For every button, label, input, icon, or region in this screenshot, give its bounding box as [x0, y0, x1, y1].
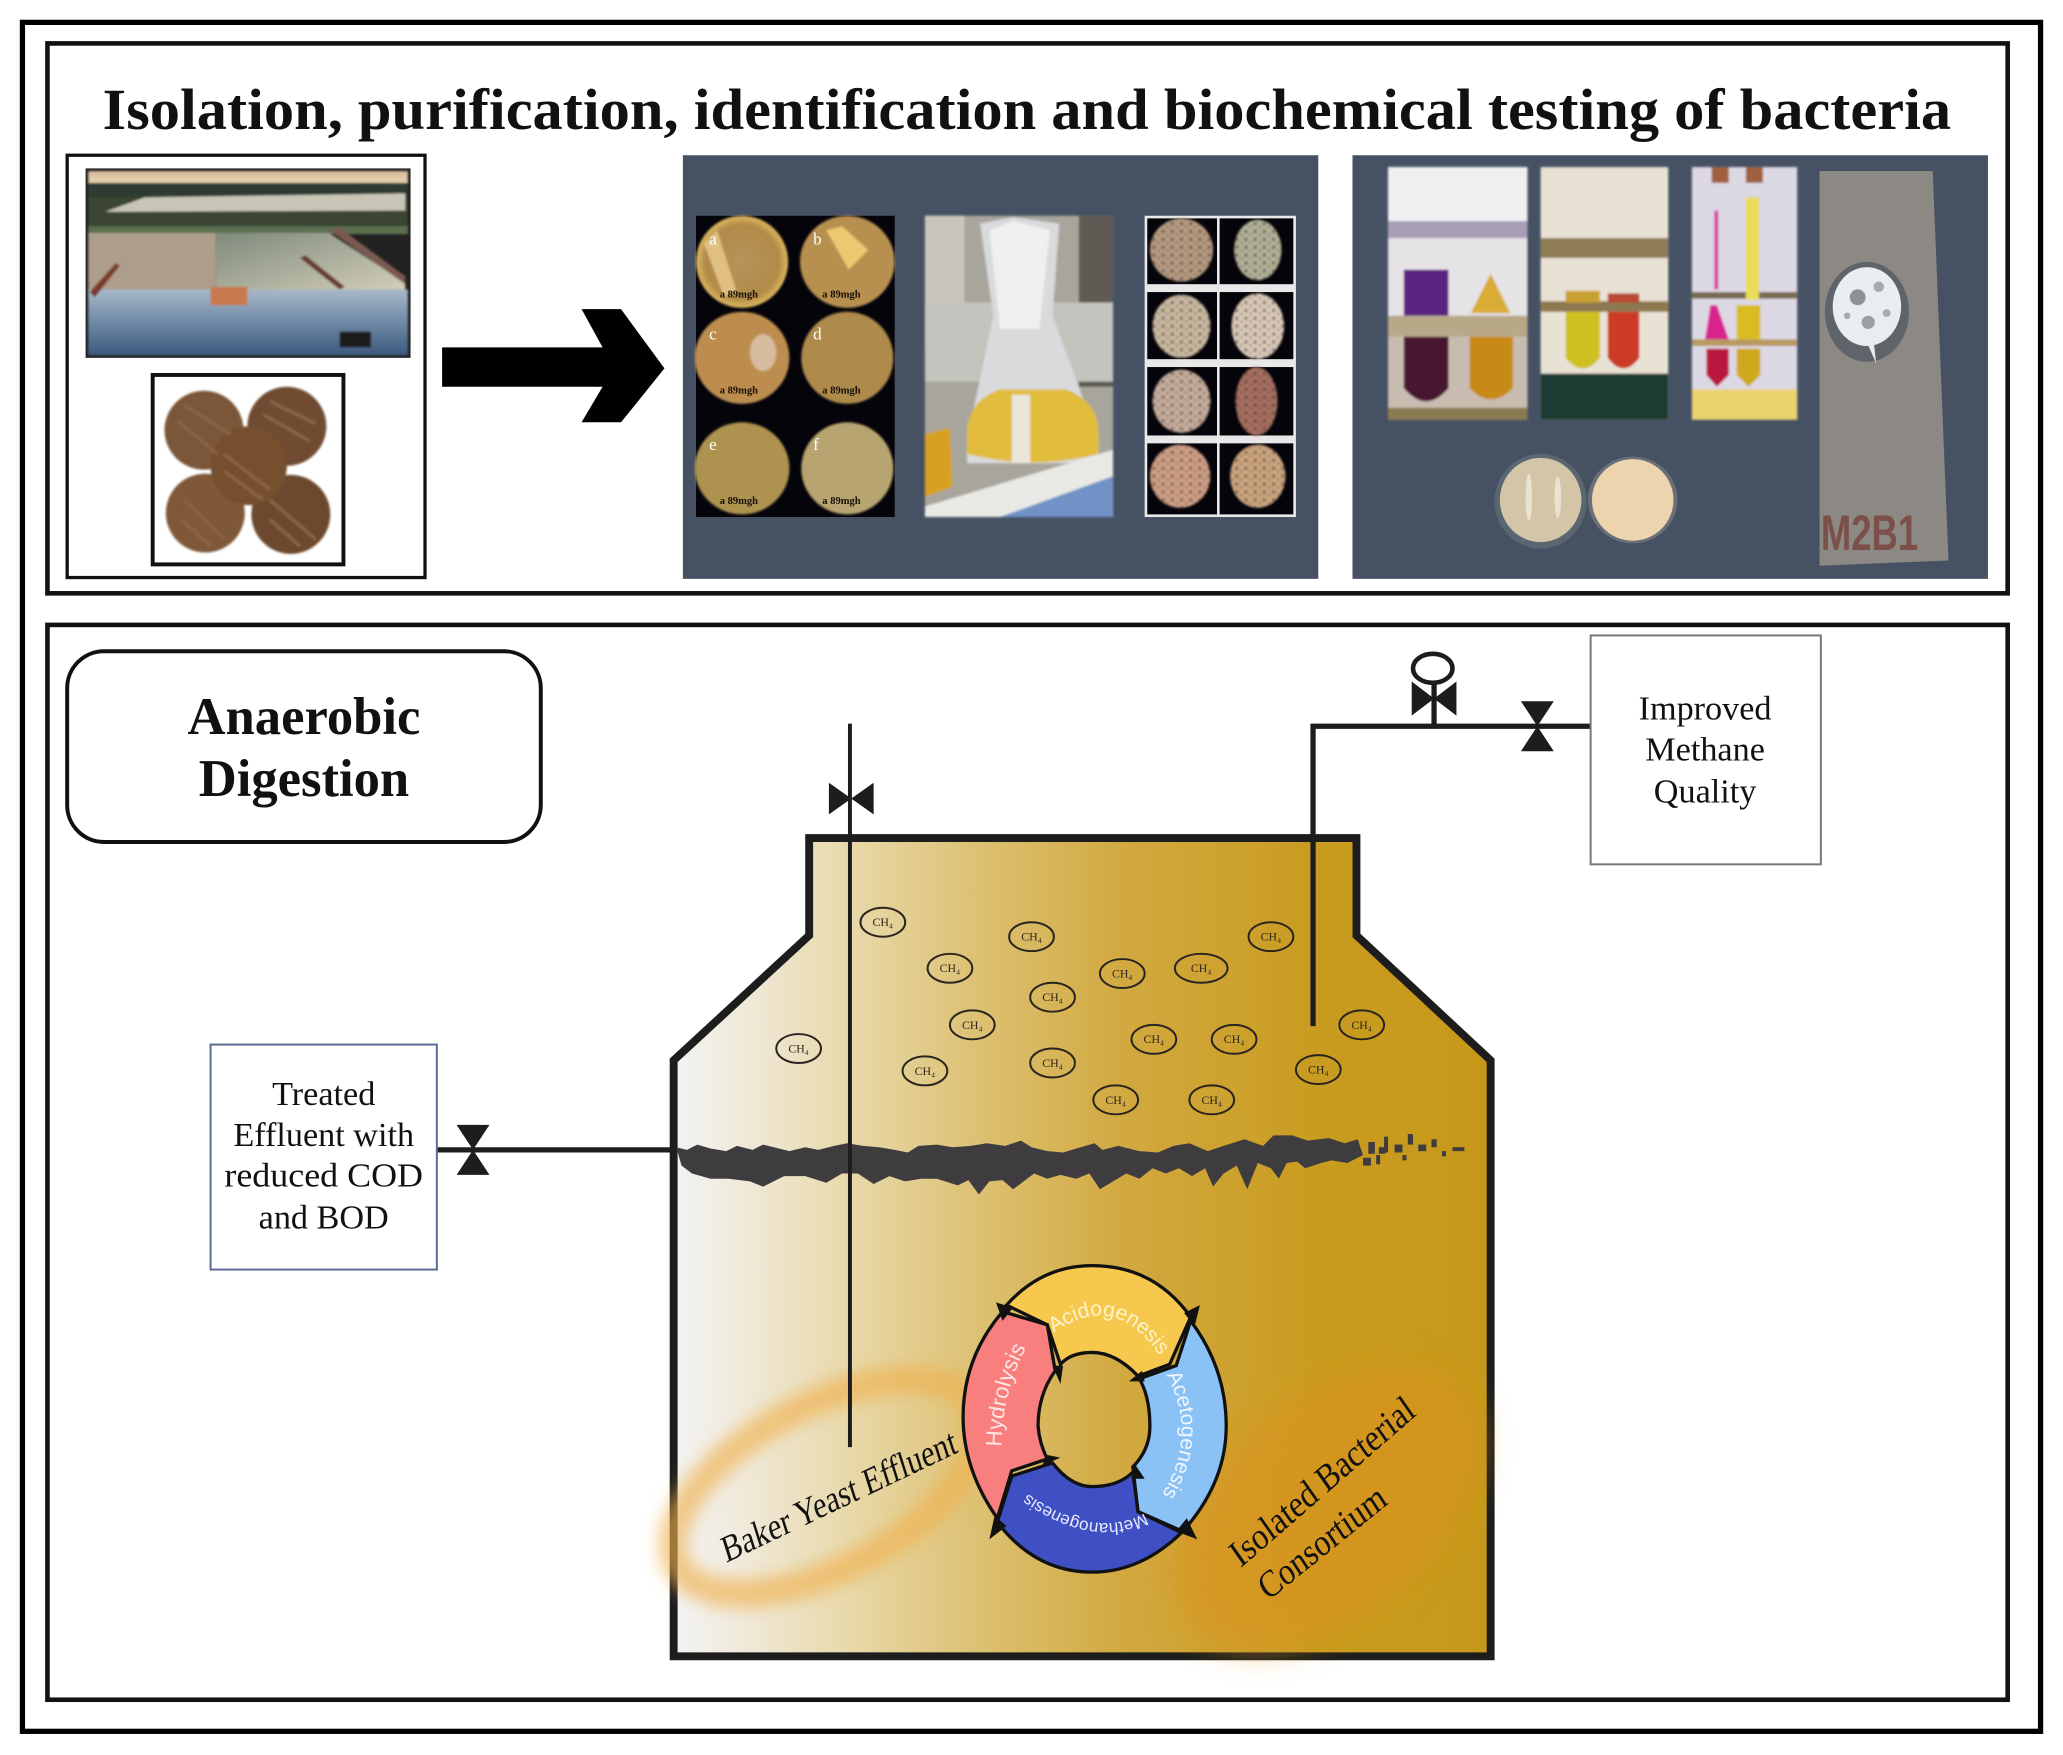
halo: baker yeast [639, 1336, 1013, 1638]
panel: isolation and testing [47, 43, 2008, 593]
arrow: to lab work [442, 309, 664, 422]
text box: treated effluent: reduced COD [224, 1158, 423, 1195]
label: hydrolysis: Hydrolysis [986, 1344, 1025, 1445]
gas bubbles: CH₄ [1021, 930, 1042, 944]
inlet pipe [848, 724, 851, 1447]
label: acetogenesis: Acetogenesis [1164, 1374, 1194, 1498]
text box: treated effluent: Effluent with [233, 1117, 414, 1154]
title: Isolation, purification, identification and biochemical testing of bacteria [103, 77, 1951, 142]
petri plates: a 89mgh [822, 496, 861, 507]
heading box: Digestion [199, 750, 409, 808]
cycle diagram [961, 1264, 1228, 1574]
petri plates: d [813, 324, 822, 343]
gas bubbles: CH₄ [1224, 1032, 1244, 1046]
petri plates: b [813, 230, 822, 249]
micrograph grid [1145, 216, 1296, 517]
gas bubbles: CH₄ [940, 961, 960, 975]
panel: cultures [683, 155, 1318, 579]
label: methanogenesis: Methanogenesis [1024, 1495, 1148, 1535]
photo: treatment tank [86, 168, 411, 358]
gas bubbles: CH₄ [1144, 1032, 1164, 1046]
petri plates: e [709, 435, 717, 454]
photo: purple and yellow tubes [1388, 167, 1527, 420]
panel: sources [67, 155, 425, 578]
panel: anaerobic digestion [45, 622, 2010, 1702]
gas bubbles: CH₄ [915, 1064, 935, 1078]
gas bubbles: CH₄ [1201, 1093, 1222, 1107]
petri plates: f [813, 435, 819, 454]
text box: improved methane: Improved [1639, 691, 1772, 728]
gas bubbles: CH₄ [788, 1041, 809, 1055]
gas bubbles: CH₄ [873, 915, 893, 929]
gas bubbles: CH₄ [1042, 1056, 1063, 1070]
gas bubbles: CH₄ [1105, 1093, 1126, 1107]
gauge valve [1412, 654, 1456, 726]
panel: biochemical tests [1353, 155, 1988, 579]
arrow tips [989, 1302, 1200, 1539]
text box: improved methane [1591, 635, 1821, 864]
photo: pink and yellow slants [1692, 167, 1797, 420]
photo: flasks [925, 216, 1113, 517]
digester vessel [674, 838, 1491, 1656]
petri plates: a 89mgh [822, 385, 861, 396]
gas bubbles: CH₄ [1042, 990, 1063, 1004]
slide label: M2B1 [1821, 505, 1918, 561]
text box: improved methane: Quality [1654, 774, 1756, 811]
text box: treated effluent: Treated [272, 1076, 375, 1113]
halo: bacterial consortium [1121, 1311, 1532, 1704]
valve: outlet [1521, 701, 1554, 751]
label: isolated bacterial consortium: Consortium [1250, 1475, 1394, 1608]
gas bubbles: CH₄ [962, 1018, 983, 1032]
petri plates: a [709, 230, 717, 249]
valve: effluent [457, 1125, 489, 1175]
label: isolated bacterial consortium: Isolated Bacterial [1222, 1387, 1422, 1575]
text box: improved methane: Methane [1645, 731, 1765, 768]
gas outlet pipe [1313, 726, 1592, 1026]
petri plates: a 89mgh [720, 289, 758, 300]
gas bubbles: CH₄ [1191, 961, 1211, 975]
petri plates: a 89mgh [720, 496, 758, 507]
photo: yellow and red tubes [1541, 167, 1668, 420]
valve: inlet [829, 783, 874, 814]
heading box [67, 651, 541, 842]
gas bubbles: CH₄ [1261, 930, 1281, 944]
label: baker yeast effluent: Baker Yeast Effluent [717, 1421, 962, 1572]
effluent pipe [437, 1148, 676, 1152]
petri plates: a 89mgh [720, 385, 758, 396]
text box: treated effluent [211, 1045, 437, 1270]
segment: methanogenesis [997, 1463, 1181, 1572]
photo: agar plates [1495, 454, 1677, 549]
photo: catalase slide [1820, 171, 1948, 566]
petri plates: a 89mgh [822, 289, 861, 300]
gas bubbles: CH₄ [1351, 1018, 1372, 1032]
gas bubbles: CH₄ [1308, 1063, 1329, 1077]
label: acidogenesis: Acidogenesis [1051, 1302, 1167, 1354]
gas bubbles [776, 908, 1384, 1114]
segment: acidogenesis [1007, 1266, 1191, 1376]
heading box: Anaerobic [188, 688, 420, 746]
scum layer [676, 1134, 1464, 1195]
segment: acetogenesis [1133, 1321, 1226, 1531]
photo: yeast cakes [153, 375, 343, 564]
gas bubbles: CH₄ [1112, 966, 1133, 980]
text box: treated effluent: and BOD [259, 1200, 389, 1237]
segment: hydrolysis [963, 1312, 1055, 1518]
petri plates: c [709, 324, 717, 343]
petri plates [695, 216, 895, 517]
